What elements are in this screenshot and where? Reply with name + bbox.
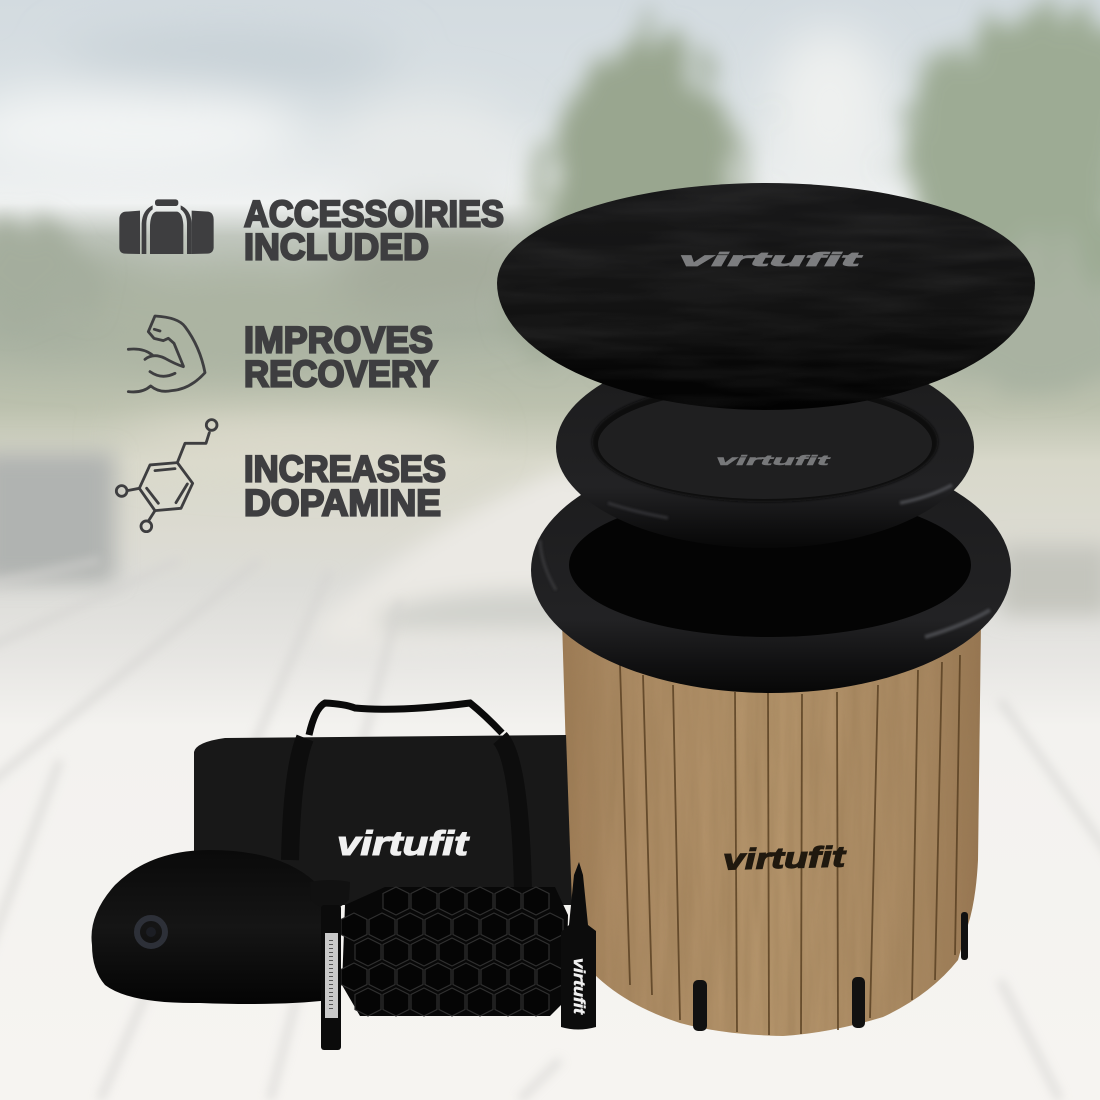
brand logo on tub: virtufit xyxy=(723,841,847,877)
brand logo on pump: virtufit xyxy=(570,958,587,1015)
feature: accessories included xyxy=(119,194,504,268)
feature list xyxy=(116,194,504,532)
tub inflatable ring xyxy=(531,447,1011,693)
brand logo on bag: virtufit xyxy=(337,825,470,863)
tub lid xyxy=(497,183,1035,410)
brand logo on lid: virtufit xyxy=(679,250,862,271)
feature: improves recovery xyxy=(128,316,438,394)
heading: improves recovery: IMPROVES xyxy=(244,320,433,360)
icon: flexed arm xyxy=(128,316,205,392)
heading: accessoiries included: INCLUDED xyxy=(244,226,429,268)
ice cube tray xyxy=(341,887,568,1016)
icon: dopamine molecule xyxy=(116,420,217,532)
heading: improves recovery: RECOVERY xyxy=(244,354,438,394)
heading: accessoiries included: ACCESSOIRIES xyxy=(244,194,504,234)
accessories xyxy=(91,703,596,1050)
brand logo on plate: virtufit xyxy=(716,452,832,468)
carry bag xyxy=(194,703,572,905)
heading: increases dopamine: INCREASES xyxy=(244,448,446,490)
icon: duffel bag xyxy=(119,199,214,254)
hand pump xyxy=(561,862,596,1030)
ice bath tub xyxy=(497,183,1035,1036)
heading: increases dopamine: DOPAMINE xyxy=(244,482,441,524)
feature: increases dopamine xyxy=(116,420,446,532)
inflatable pillow xyxy=(91,850,330,1004)
wooden tub body xyxy=(562,620,981,1036)
tub feet slots xyxy=(693,912,968,1031)
middle inflatable ring with plate xyxy=(556,346,974,548)
thermometer xyxy=(310,880,350,1050)
